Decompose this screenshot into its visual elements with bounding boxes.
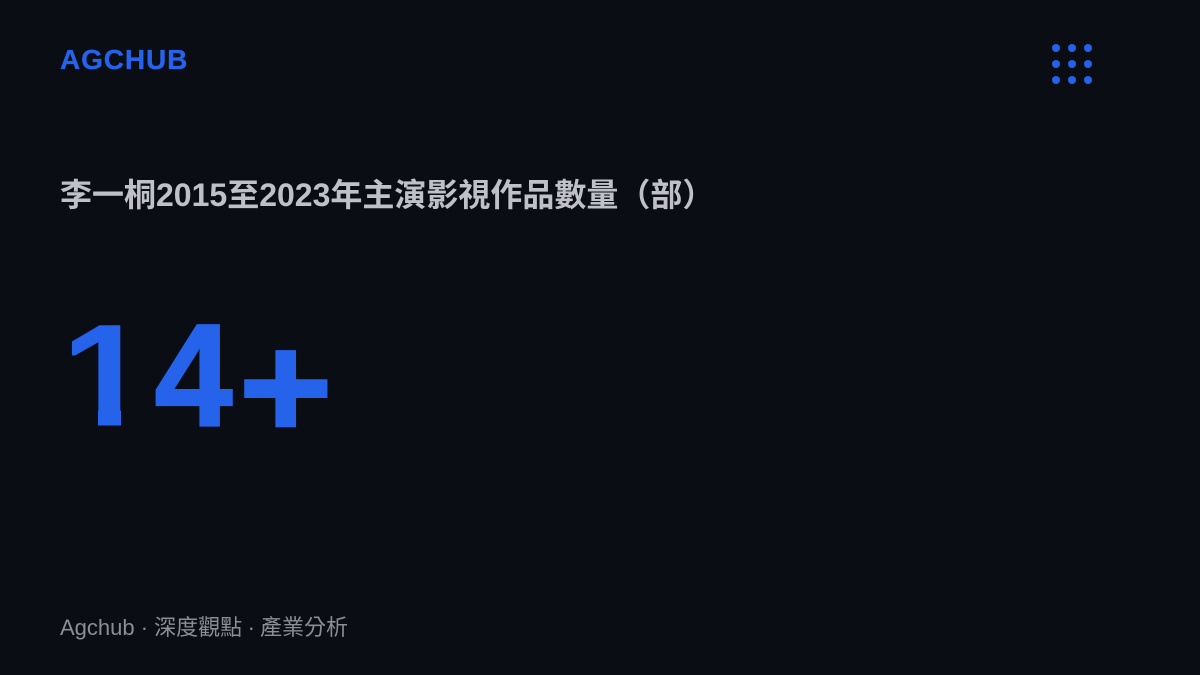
big number: + bbox=[239, 305, 332, 468]
logo wordmark: AGCHUB bbox=[60, 44, 188, 75]
big number: 1 bbox=[61, 294, 150, 456]
big number bbox=[72, 294, 332, 468]
footer text: Agchub · 深度觀點 · 產業分析 bbox=[60, 615, 348, 640]
title: 李一桐2015至2023年主演影視作品數量（部） bbox=[60, 177, 714, 213]
big number: 4 bbox=[155, 294, 232, 456]
icon: dot grid bbox=[1052, 44, 1092, 84]
